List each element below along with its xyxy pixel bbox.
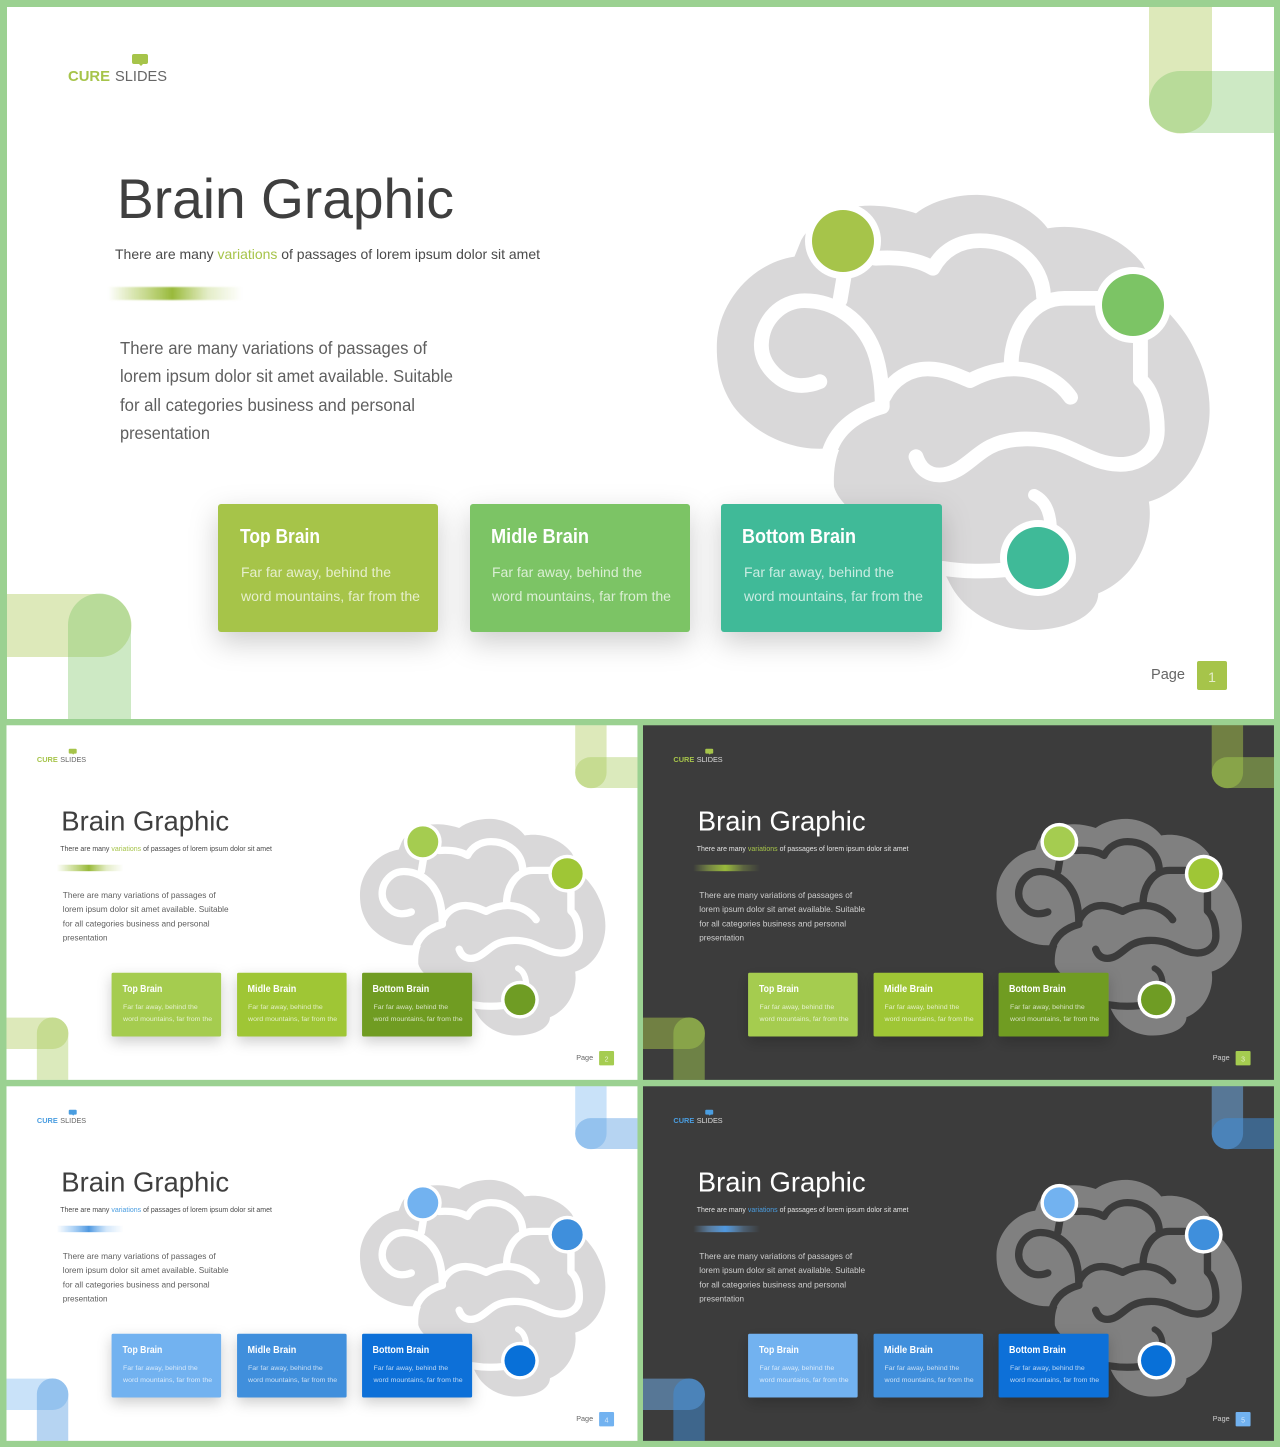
page number: Page [576, 1414, 593, 1423]
card: top brain [748, 973, 858, 1037]
body text: presentation [699, 932, 744, 942]
logo [37, 749, 86, 764]
card: midle brain [237, 973, 347, 1037]
body text: lorem ipsum dolor sit amet available. Suitable [63, 904, 229, 914]
gradient accent bar [57, 865, 124, 871]
body text: There are many variations of passages of [63, 890, 216, 900]
card: bottom brain: Bottom Brain [742, 526, 856, 548]
panel: small slide, green on dark [643, 725, 1274, 1080]
brain illustration [996, 1180, 1242, 1397]
page number: Page [1213, 1414, 1230, 1423]
marker: middle [1185, 1216, 1223, 1254]
card: bottom brain: Far far away, behind the [1010, 1004, 1085, 1011]
corner decoration: bottom left [643, 1017, 705, 1080]
logo [673, 1110, 723, 1125]
page number: Page [1151, 666, 1185, 683]
gradient accent bar [108, 287, 242, 300]
card: midle brain: Midle Brain [884, 984, 933, 995]
card: midle brain: word mountains, far from the [491, 589, 671, 604]
page number: 2 [605, 1056, 609, 1063]
card: bottom brain [721, 504, 942, 632]
page number: 5 [1241, 1417, 1245, 1424]
body text: lorem ipsum dolor sit amet available. Suitable [63, 1265, 229, 1275]
card: top brain: Top Brain [759, 984, 799, 995]
body text: presentation [120, 423, 210, 443]
marker: bottom [1000, 520, 1076, 596]
card: bottom brain: Far far away, behind the [1010, 1365, 1085, 1372]
card: midle brain [874, 1334, 983, 1398]
marker: top [805, 203, 881, 279]
logo [37, 1110, 86, 1125]
gradient accent bar [693, 865, 760, 871]
card: top brain: Far far away, behind the [760, 1365, 834, 1372]
corner decoration: top right [1212, 1086, 1274, 1149]
marker: bottom [1138, 1342, 1175, 1380]
card: top brain [112, 973, 221, 1037]
card: midle brain: Midle Brain [884, 1345, 933, 1356]
marker: middle [548, 855, 586, 893]
corner decoration: bottom left [6, 1017, 68, 1080]
brain illustration [717, 195, 1210, 630]
body text: lorem ipsum dolor sit amet available. Suitable [120, 366, 453, 386]
corner decoration: top right [575, 1086, 637, 1149]
page number: 4 [605, 1417, 609, 1424]
card: bottom brain: Bottom Brain [1009, 1345, 1066, 1356]
body text: for all categories business and personal [699, 918, 846, 928]
card: bottom brain: word mountains, far from the [372, 1377, 463, 1384]
marker: middle [1185, 855, 1223, 893]
marker: top [1040, 823, 1078, 861]
panel: main slide, green on white [7, 7, 1274, 719]
logo: CURE [673, 1116, 694, 1125]
card: midle brain: word mountains, far from the [883, 1377, 974, 1384]
card: midle brain: Far far away, behind the [885, 1004, 959, 1011]
logo: SLIDES [60, 755, 86, 764]
corner decoration: top right [1149, 7, 1274, 134]
card: top brain: Far far away, behind the [123, 1004, 198, 1011]
card: top brain: word mountains, far from the [758, 1016, 849, 1023]
marker: bottom [1138, 981, 1175, 1019]
card: top brain: word mountains, far from the [122, 1377, 212, 1384]
card: midle brain: Midle Brain [248, 1345, 296, 1356]
card: midle brain: Far far away, behind the [248, 1004, 323, 1011]
subtitle: There are many variations of passages of lorem ipsum dolor sit amet [697, 846, 908, 853]
logo [68, 54, 167, 85]
marker: middle [548, 1216, 586, 1254]
card: midle brain: Far far away, behind the [885, 1365, 959, 1372]
brain illustration [996, 819, 1242, 1036]
page number [1213, 1051, 1251, 1065]
logo: SLIDES [60, 1116, 86, 1125]
marker: top [404, 823, 442, 861]
card: midle brain: Midle Brain [491, 526, 589, 548]
body text: There are many variations of passages of [120, 338, 427, 358]
corner decoration: top right [575, 725, 637, 788]
card: top brain [112, 1334, 221, 1398]
card: midle brain: Midle Brain [248, 984, 296, 995]
body text: for all categories business and personal [63, 918, 210, 928]
card: midle brain [470, 504, 690, 632]
subtitle: There are many variations of passages of lorem ipsum dolor sit amet [115, 246, 540, 262]
panel: small slide, green on white [6, 725, 637, 1080]
title: Brain Graphic [61, 805, 229, 836]
card: bottom brain: Bottom Brain [1009, 984, 1066, 995]
body text: for all categories business and personal [63, 1279, 210, 1289]
card: bottom brain [362, 1334, 472, 1398]
card: midle brain [874, 973, 983, 1037]
body text: presentation [63, 932, 108, 942]
card: bottom brain [362, 973, 472, 1037]
page number [576, 1412, 614, 1426]
subtitle: There are many variations of passages of lorem ipsum dolor sit amet [697, 1207, 908, 1214]
card: bottom brain: word mountains, far from the [1009, 1377, 1099, 1384]
card: bottom brain: Far far away, behind the [374, 1004, 448, 1011]
brain illustration [360, 819, 605, 1036]
card: top brain: Top Brain [123, 1345, 162, 1356]
gradient accent bar [57, 1226, 124, 1232]
card: top brain: Top Brain [123, 984, 162, 995]
page number: Page [1213, 1053, 1230, 1062]
title: Brain Graphic [117, 167, 454, 230]
marker: bottom [501, 981, 539, 1019]
logo: CURE [673, 755, 694, 764]
card: bottom brain: word mountains, far from the [372, 1016, 463, 1023]
card: bottom brain: Far far away, behind the [374, 1365, 448, 1372]
body text: There are many variations of passages of [699, 1251, 853, 1261]
body text: There are many variations of passages of [63, 1251, 216, 1261]
card: top brain [748, 1334, 858, 1398]
logo: SLIDES [115, 68, 167, 85]
corner decoration: bottom left [7, 594, 132, 719]
card: midle brain [237, 1334, 347, 1398]
corner decoration: bottom left [6, 1378, 68, 1441]
body text [699, 1251, 865, 1303]
body text: lorem ipsum dolor sit amet available. Suitable [699, 1265, 865, 1275]
corner decoration: top right [1212, 725, 1274, 788]
card: bottom brain [999, 1334, 1109, 1398]
card: midle brain: word mountains, far from the [247, 1016, 337, 1023]
logo [673, 749, 723, 764]
card: midle brain: word mountains, far from the [883, 1016, 974, 1023]
logo: SLIDES [697, 1116, 723, 1125]
card: top brain [218, 504, 438, 632]
body text: There are many variations of passages of [699, 890, 853, 900]
page number [1151, 661, 1227, 690]
page number: Page [576, 1053, 593, 1062]
card: top brain: word mountains, far from the [240, 589, 420, 604]
body text: presentation [63, 1293, 108, 1303]
card: top brain: Top Brain [240, 526, 320, 548]
body text [63, 1251, 229, 1303]
card: top brain: word mountains, far from the [122, 1016, 212, 1023]
body text: for all categories business and personal [699, 1279, 846, 1289]
panel: small slide, blue on dark [643, 1086, 1274, 1441]
corner decoration: bottom left [643, 1378, 705, 1441]
subtitle: There are many variations of passages of lorem ipsum dolor sit amet [60, 846, 272, 853]
card: bottom brain: Far far away, behind the [744, 565, 894, 580]
body text: lorem ipsum dolor sit amet available. Suitable [699, 904, 865, 914]
logo: CURE [37, 1116, 58, 1125]
page number: 1 [1208, 669, 1216, 685]
page number [1213, 1412, 1251, 1426]
brain illustration [360, 1180, 605, 1397]
panel: small slide, blue on white [6, 1086, 637, 1441]
subtitle: There are many variations of passages of lorem ipsum dolor sit amet [60, 1207, 272, 1214]
card: bottom brain: word mountains, far from the [1009, 1016, 1099, 1023]
marker: top [1040, 1184, 1078, 1222]
body text [699, 890, 865, 942]
body text [63, 890, 229, 942]
logo: SLIDES [697, 755, 723, 764]
logo: CURE [68, 68, 110, 85]
card: midle brain: Far far away, behind the [248, 1365, 323, 1372]
body text [120, 338, 453, 443]
card: bottom brain: word mountains, far from the [743, 589, 923, 604]
card: top brain: Far far away, behind the [760, 1004, 834, 1011]
card: bottom brain [999, 973, 1109, 1037]
card: bottom brain: Bottom Brain [373, 1345, 429, 1356]
card: top brain: Top Brain [759, 1345, 799, 1356]
body text: presentation [699, 1293, 744, 1303]
body text: for all categories business and personal [120, 395, 415, 415]
card: midle brain: Far far away, behind the [492, 565, 642, 580]
page number [576, 1051, 614, 1065]
card: top brain: Far far away, behind the [241, 565, 391, 580]
title: Brain Graphic [698, 805, 866, 836]
title: Brain Graphic [698, 1166, 866, 1197]
card: top brain: Far far away, behind the [123, 1365, 198, 1372]
card: midle brain: word mountains, far from the [247, 1377, 337, 1384]
title: Brain Graphic [61, 1166, 229, 1197]
logo: CURE [37, 755, 58, 764]
marker: bottom [501, 1342, 539, 1380]
page number: 3 [1241, 1056, 1245, 1063]
marker: middle [1095, 267, 1171, 343]
card: top brain: word mountains, far from the [758, 1377, 849, 1384]
card: bottom brain: Bottom Brain [373, 984, 429, 995]
gradient accent bar [693, 1226, 760, 1232]
marker: top [404, 1184, 442, 1222]
